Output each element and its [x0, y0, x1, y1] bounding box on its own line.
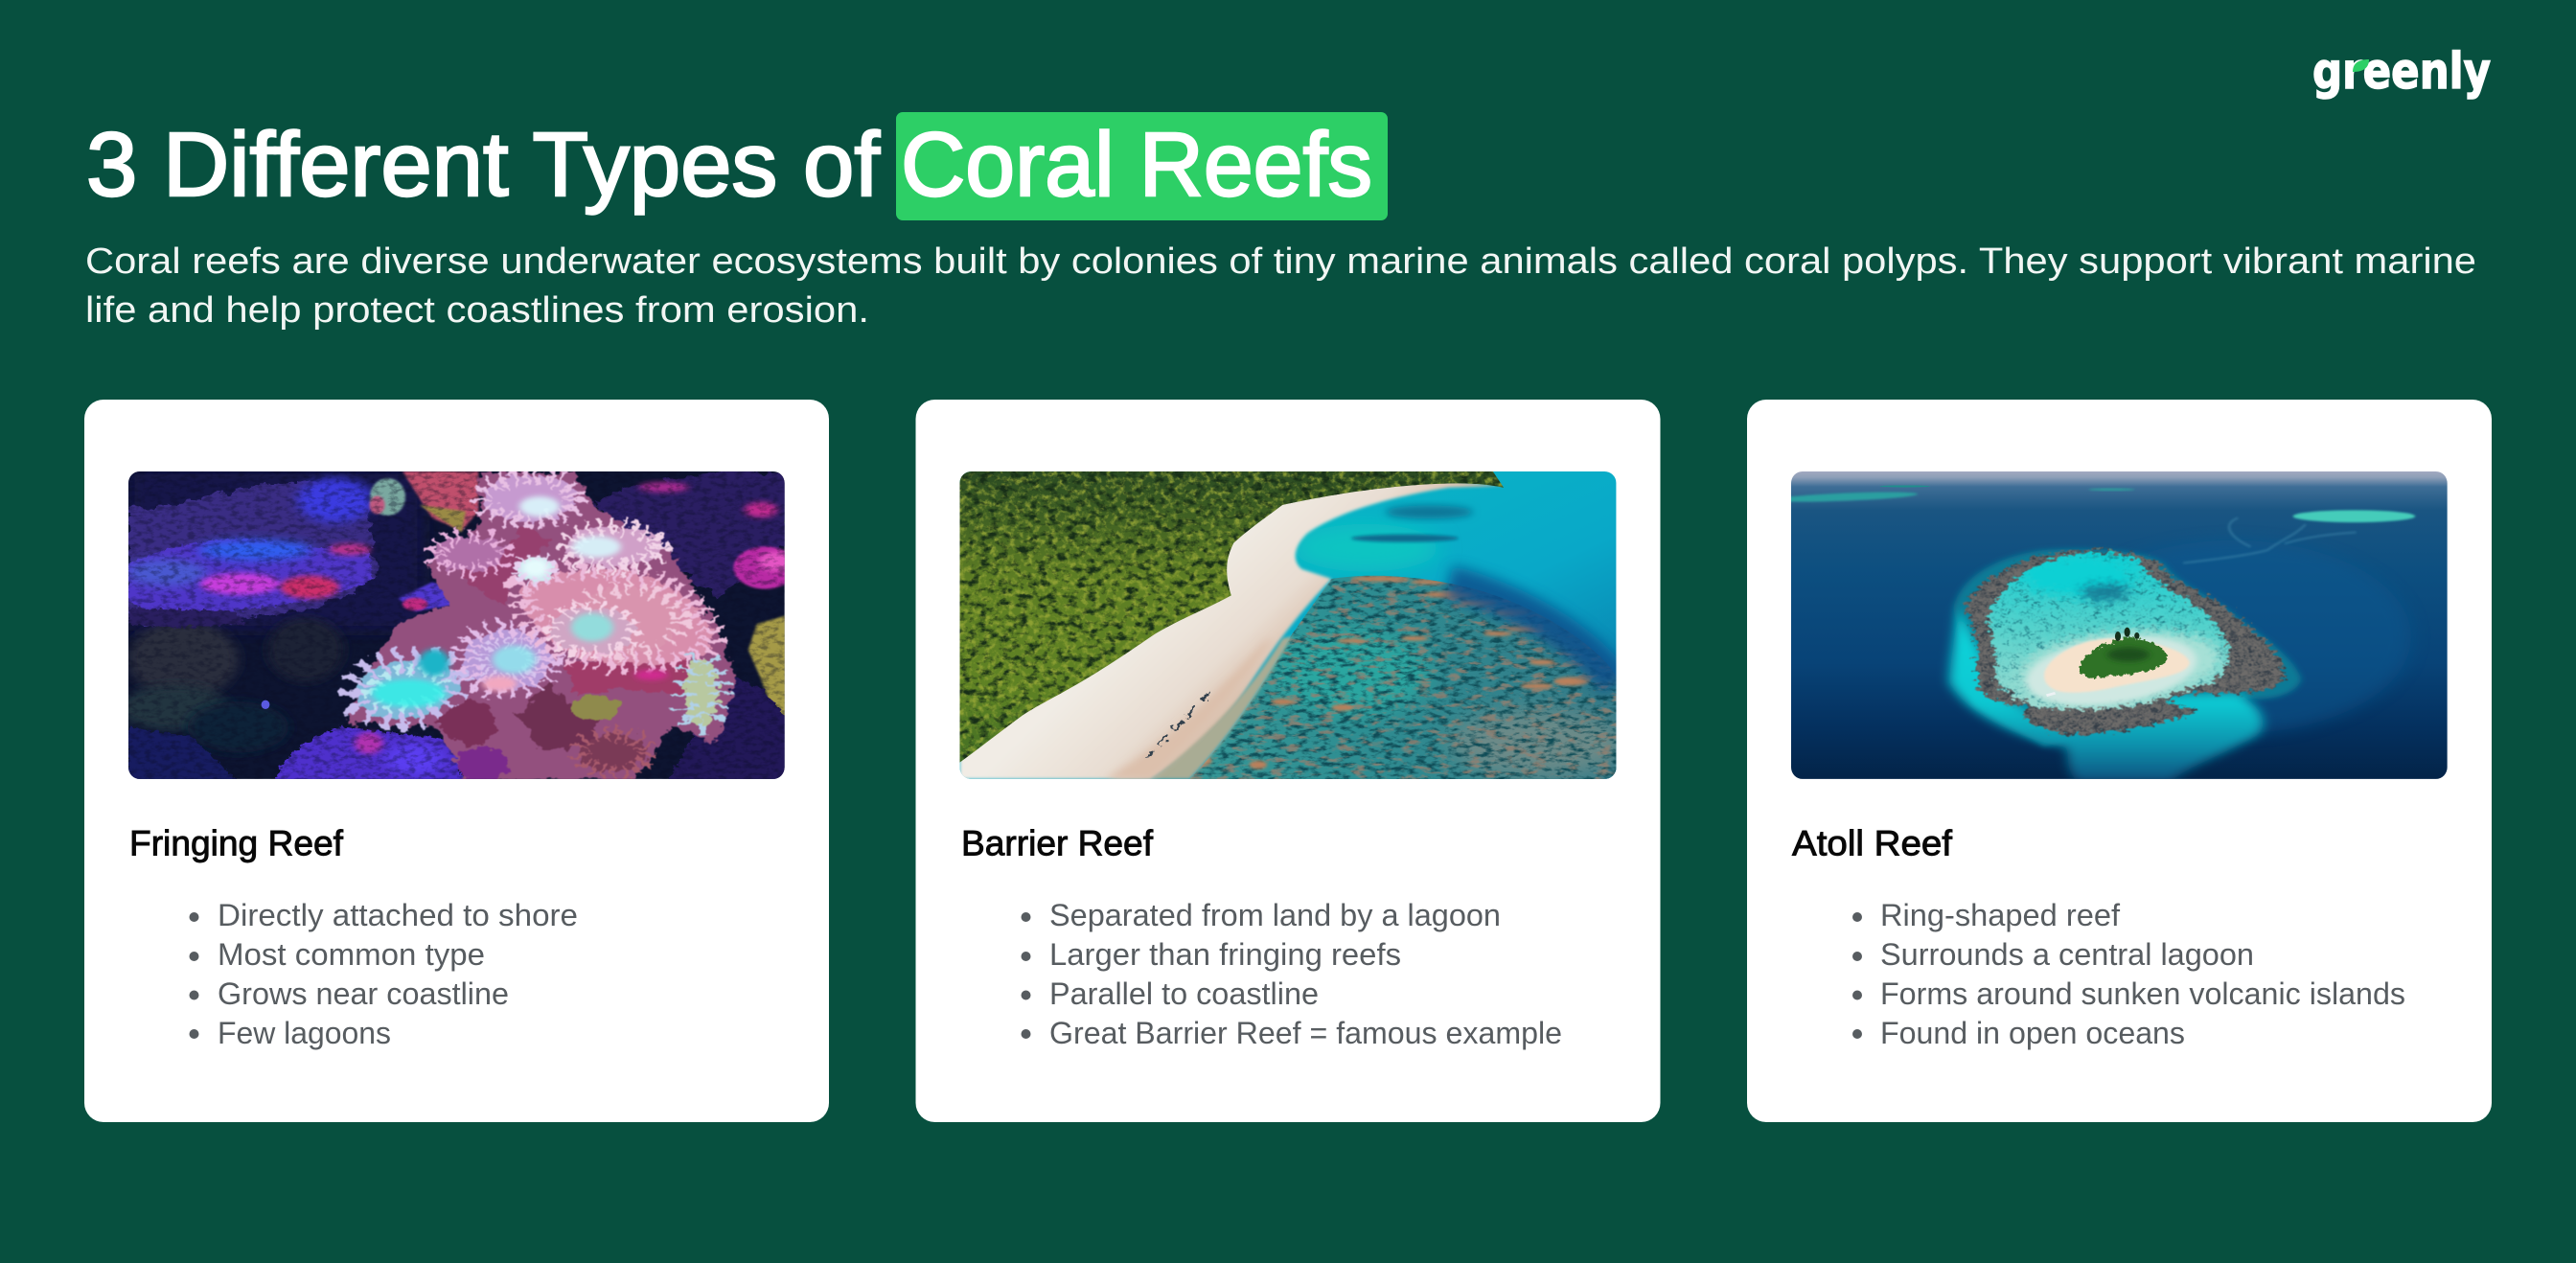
heading: Atoll Reef: Atoll Reef [1792, 824, 1953, 862]
island forest [2078, 637, 2169, 677]
bullet list: barrier reef: Great Barrier Reef = famous example [1049, 1016, 1562, 1050]
reef ring [1963, 546, 2288, 738]
forest [960, 471, 1504, 763]
coral body [346, 472, 736, 782]
intro text [85, 241, 2476, 331]
reef flat [1190, 575, 1616, 779]
title: 3 Different Types of [86, 114, 881, 216]
image: beach and barrier reef [960, 471, 1625, 779]
heading: Fringing Reef: Fringing Reef [129, 824, 344, 862]
intro text: Coral reefs are diverse underwater ecosystems built by colonies of tiny marine animals called coral polyps. They support vibrant marine [85, 241, 2476, 282]
shallow cyan [1949, 608, 2263, 782]
title highlight: Coral Reefs: Coral Reefs [901, 114, 1372, 216]
bullet list: barrier reef: Separated from land by a lagoon [1049, 898, 1501, 932]
bullet list: barrier reef [1022, 898, 1562, 1050]
sand [960, 476, 1503, 779]
panel: atoll reef [1747, 400, 2492, 1122]
bullet list: atoll reef: Found in open oceans [1880, 1016, 2185, 1050]
bullet list: atoll reef [1852, 898, 2405, 1050]
teal reef fringe [1953, 549, 2301, 746]
title [86, 112, 1388, 220]
bullet list: barrier reef: Larger than fringing reefs [1049, 937, 1401, 972]
image: atoll island [1774, 470, 2452, 782]
bullet list: fringing reef: Few lagoons [218, 1016, 391, 1050]
heading: Barrier Reef: Barrier Reef [961, 824, 1154, 862]
bullet list: atoll reef: Surrounds a central lagoon [1880, 937, 2254, 972]
panel: fringing reef [84, 400, 829, 1122]
bullet list: fringing reef: Most common type [218, 937, 485, 972]
bullet list: barrier reef: Parallel to coastline [1049, 976, 1319, 1011]
bullet list: fringing reef: Directly attached to shore [218, 898, 578, 932]
logo: greenly: greenly [2312, 43, 2491, 101]
bullet list: atoll reef: Ring-shaped reef [1880, 898, 2121, 932]
island sand [2024, 633, 2198, 709]
lagoon [1984, 548, 2233, 713]
bullet list: fringing reef: Grows near coastline [218, 976, 509, 1011]
panel: barrier reef [916, 400, 1660, 1122]
bullet list: fringing reef [190, 898, 578, 1050]
image: coral anemones [120, 470, 796, 782]
intro text: life and help protect coastlines from erosion. [85, 290, 869, 331]
bullet list: atoll reef: Forms around sunken volcanic islands [1880, 976, 2405, 1011]
